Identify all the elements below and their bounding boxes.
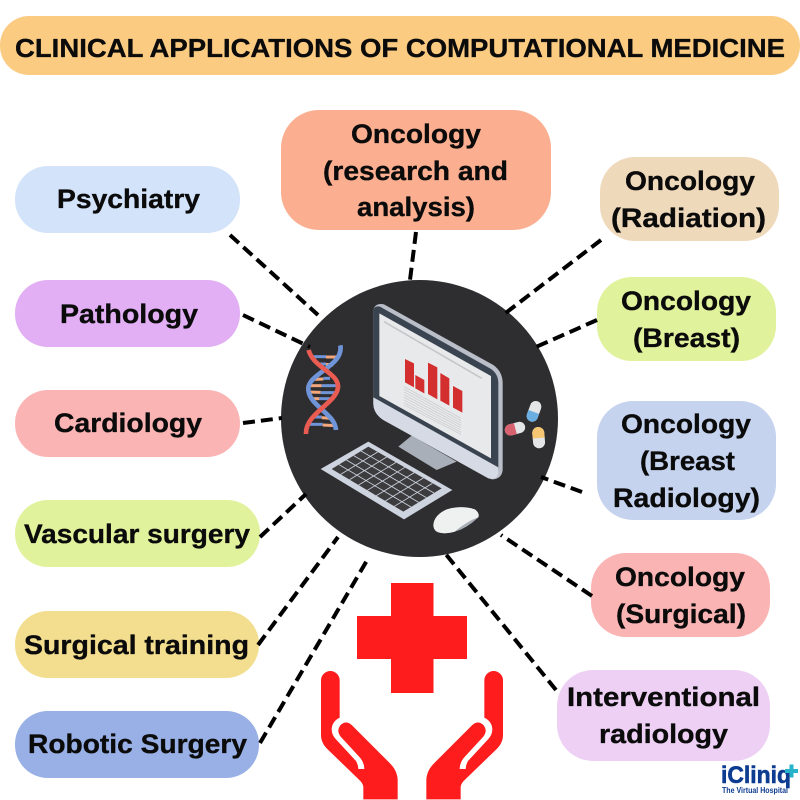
panel: oncology research and analysis: Oncology — [351, 119, 481, 149]
central circle with computer illustration — [281, 280, 558, 557]
title — [0, 16, 800, 75]
panel: oncology research and analysis: analysis) — [357, 192, 475, 222]
icon: caring hands — [321, 671, 503, 799]
icon: red cross — [357, 583, 467, 693]
panel: psychiatry: Psychiatry — [57, 184, 200, 214]
panel: surgical training — [15, 611, 259, 678]
panel: oncology radiation — [600, 157, 779, 241]
icon: monitor — [373, 304, 503, 479]
icon: keyboard — [321, 442, 452, 519]
panel: interventional radiology: Interventional — [567, 682, 760, 712]
panel: oncology breast radiology: Oncology — [621, 409, 751, 439]
panel: oncology breast radiology: (Breast — [640, 446, 735, 476]
panel: pathology: Pathology — [60, 299, 198, 329]
panel: vascular surgery — [15, 500, 260, 567]
panel: robotic surgery: Robotic Surgery — [28, 729, 247, 759]
panel: oncology research and analysis: (research and — [323, 156, 508, 186]
panel: oncology breast — [597, 277, 776, 361]
panel: cardiology: Cardiology — [54, 408, 202, 438]
panel: oncology radiation: Oncology — [625, 166, 755, 196]
panel: psychiatry — [15, 166, 240, 233]
icon: monitor stand — [398, 436, 457, 470]
panel: oncology research and analysis — [281, 110, 551, 230]
panel: robotic surgery — [15, 711, 259, 778]
panel: cardiology — [15, 390, 240, 457]
logo: iCliniq: iCliniq — [721, 762, 791, 789]
panel: oncology surgical: (Surgical) — [616, 599, 746, 629]
panel: oncology breast radiology — [597, 401, 776, 520]
panel: interventional radiology — [557, 670, 770, 761]
panel: surgical training: Surgical training — [24, 630, 249, 660]
panel: oncology breast: (Breast) — [633, 323, 740, 353]
icon: mouse — [433, 507, 479, 533]
panel: oncology surgical: Oncology — [615, 562, 745, 592]
logo: iCliniq: The Virtual Hospital — [722, 786, 788, 795]
panel: oncology radiation: (Radiation) — [611, 203, 766, 233]
panel: vascular surgery: Vascular surgery — [24, 519, 250, 549]
icon: pills — [504, 399, 546, 449]
panel: interventional radiology: radiology — [599, 719, 728, 749]
panel: oncology surgical — [591, 553, 770, 637]
icon: DNA helix — [306, 345, 341, 434]
panel: oncology breast: Oncology — [621, 286, 751, 316]
title: CLINICAL APPLICATIONS OF COMPUTATIONAL MEDICINE — [15, 33, 785, 63]
connector lines — [230, 232, 601, 743]
panel: pathology — [15, 280, 240, 347]
panel: oncology breast radiology: Radiology) — [613, 483, 760, 513]
